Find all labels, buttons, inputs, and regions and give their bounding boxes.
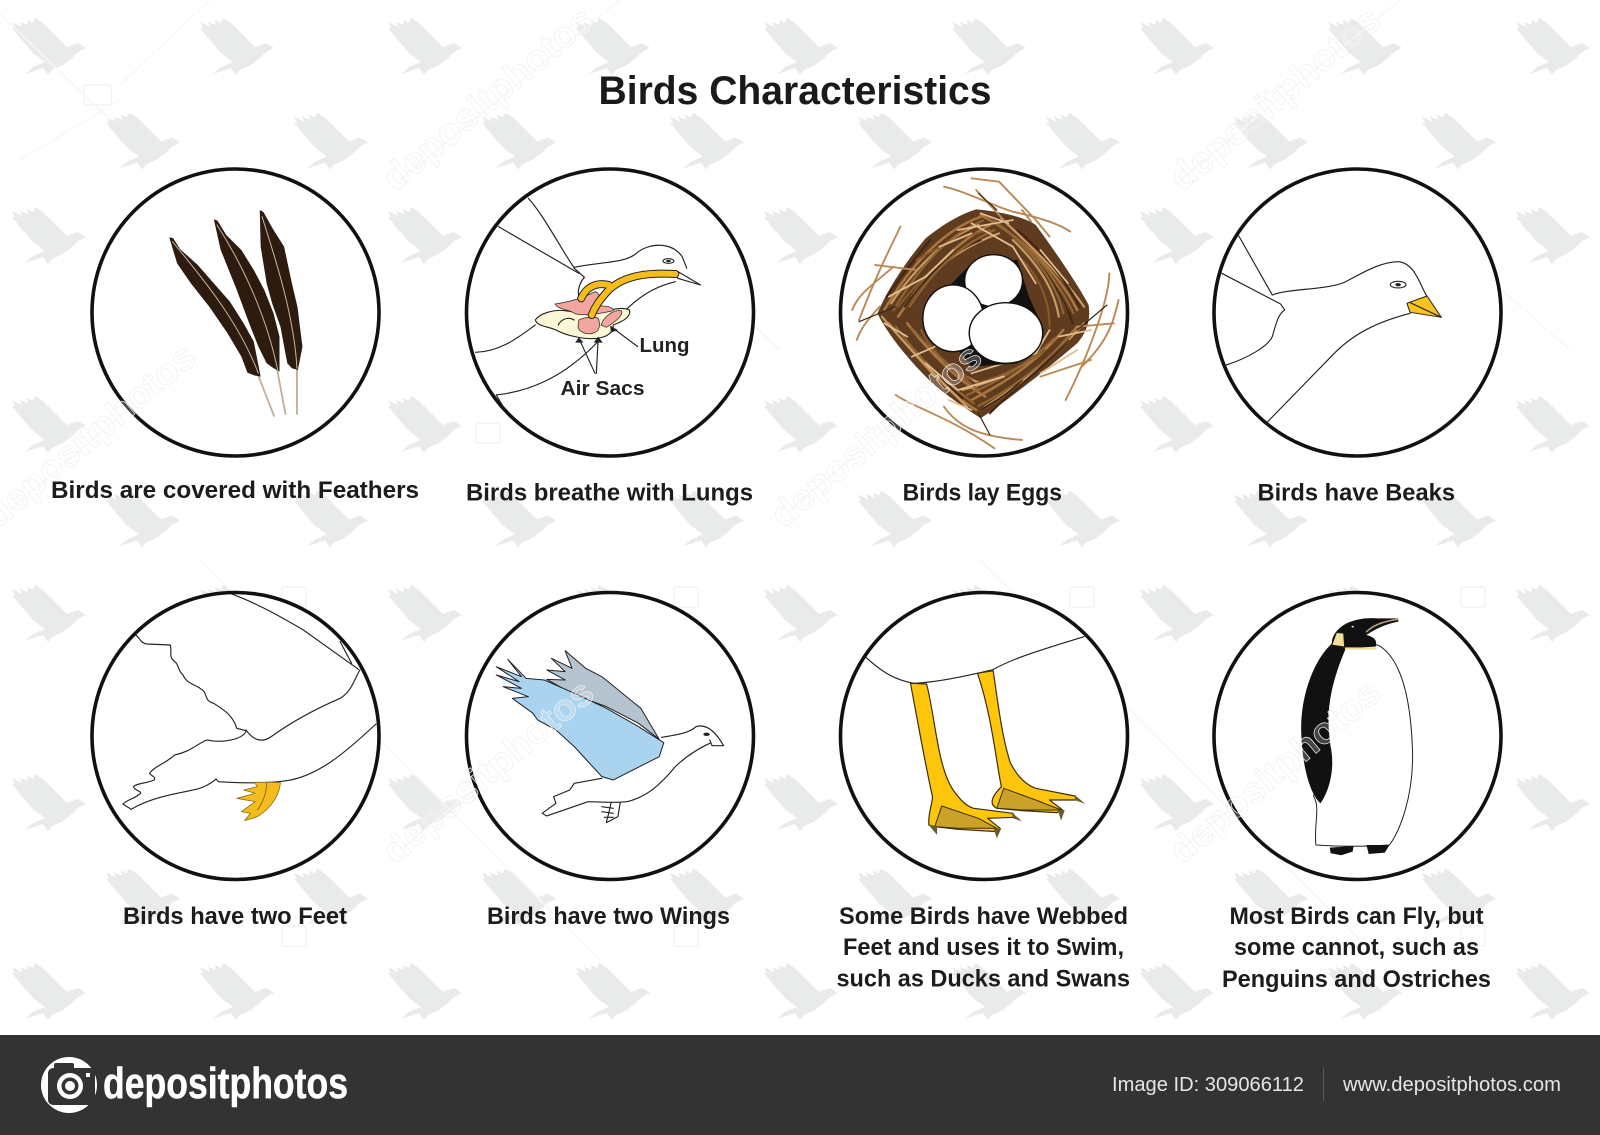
caption: beaks: Birds have Beaks [1258, 480, 1455, 507]
beak [676, 271, 701, 285]
panel: lungs [466, 169, 754, 507]
image id: Image ID: 309066112 [1112, 1074, 1304, 1096]
icon: flying bird feet [123, 593, 376, 821]
egg [923, 285, 983, 352]
watermark text [0, 0, 1388, 871]
penguin feet [1330, 845, 1389, 855]
front leg [910, 683, 1015, 832]
watermark text: depositphotos [762, 336, 989, 535]
lungs [555, 292, 622, 334]
caption: flightless birds: Penguins and Ostriches [1222, 966, 1491, 993]
caption: lungs: Birds breathe with Lungs [466, 480, 753, 507]
caption: flightless birds [1222, 903, 1491, 993]
panel: beaks [1214, 169, 1501, 507]
caption: webbed feet: Feet and uses it to Swim, [843, 934, 1124, 961]
footer brand: depositphotos [103, 1059, 348, 1108]
arrows [579, 327, 638, 373]
panel: webbed feet [836, 592, 1130, 993]
title: Birds Characteristics [598, 69, 992, 113]
body outline [542, 726, 724, 816]
penguin head [1332, 618, 1399, 648]
egg [969, 303, 1043, 363]
panel: feathers [51, 169, 419, 504]
near wing [496, 659, 664, 780]
beak [1407, 296, 1441, 317]
watermark text: depositphotos [1161, 0, 1388, 198]
penguin back and flipper [1301, 643, 1346, 803]
label: feathers: Birds are covered with Feathers [51, 477, 419, 504]
far wing [547, 651, 659, 739]
icon: three feathers [169, 210, 302, 416]
eye [1390, 281, 1406, 288]
website: www.depositphotos.com [1342, 1074, 1561, 1096]
icon: penguin [1301, 618, 1413, 855]
label: lung: Lung [640, 335, 690, 357]
panel: flightless birds [1214, 592, 1501, 993]
panel: feet [92, 592, 379, 930]
rear leg [978, 671, 1077, 813]
watermark text: depositphotos [374, 0, 601, 198]
trachea [581, 274, 675, 315]
caption: feet: Birds have two Feet [123, 903, 347, 930]
foot [237, 782, 280, 821]
icon: nest with eggs [852, 178, 1118, 448]
label: air sacs: Air Sacs [560, 378, 644, 400]
panel: eggs [840, 169, 1128, 507]
icon: bird with yellow beak [1222, 236, 1441, 422]
air sacs [535, 308, 630, 339]
icon: webbed yellow feet [866, 637, 1085, 838]
penguin belly [1314, 643, 1413, 846]
icon: dove with coloured wings [496, 651, 724, 823]
icon: bird respiratory system [476, 198, 701, 407]
watermark text: depositphotos [1161, 672, 1388, 871]
caption: wings: Birds have two Wings [487, 903, 730, 930]
panel: wings [466, 592, 754, 930]
caption: webbed feet: Some Birds have Webbed [839, 903, 1128, 930]
loose straw [852, 178, 1118, 448]
egg [965, 255, 1023, 307]
caption: flightless birds: some cannot, such as [1234, 934, 1479, 961]
caption: flightless birds: Most Birds can Fly, but [1230, 903, 1484, 930]
icon: depositphotos logo [41, 1057, 97, 1113]
watermark text: depositphotos [374, 672, 601, 871]
caption: eggs: Birds lay Eggs [903, 480, 1062, 507]
footer bar [0, 1035, 1600, 1135]
caption: webbed feet: such as Ducks and Swans [836, 966, 1130, 993]
nest hollow [926, 260, 1044, 367]
caption: webbed feet [836, 903, 1130, 993]
